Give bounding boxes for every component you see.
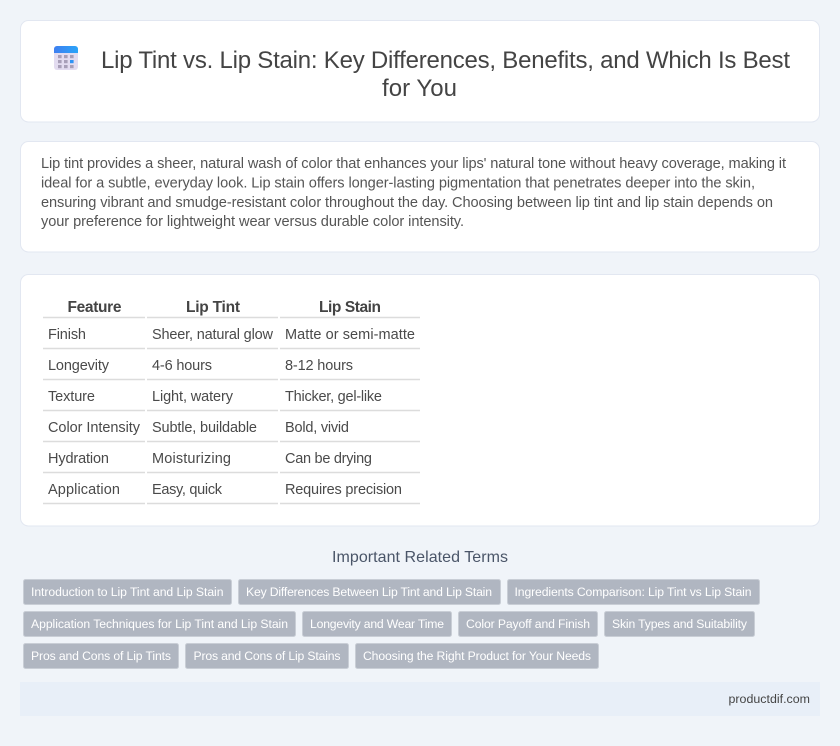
tag: Key Differences Between Lip Tint and Lip Stain <box>246 585 492 599</box>
tag <box>24 644 178 668</box>
text block: intro paragraph: Lip tint provides a sheer, natural wash of color that enhances your lips' natural tone without heavy coverage, making it <box>41 156 786 172</box>
footer bar: productdif.com <box>728 692 810 706</box>
table row: application: Easy, quick <box>152 482 223 498</box>
tag: Introduction to Lip Tint and Lip Stain <box>31 585 224 599</box>
table row: hydration: Can be drying <box>285 451 372 467</box>
table row: hydration <box>48 451 372 467</box>
table row: color intensity: Subtle, buildable <box>152 420 257 436</box>
table row: finish: Sheer, natural glow <box>152 327 274 343</box>
tag <box>302 612 452 636</box>
icon: calendar <box>54 46 78 70</box>
footer bar <box>20 682 820 716</box>
text block: intro paragraph: your preference for lightweight wear versus durable color intensity. <box>41 214 464 230</box>
text block: intro paragraph <box>41 156 786 230</box>
tag <box>238 580 500 604</box>
table row: longevity: 8-12 hours <box>285 358 353 374</box>
table row: texture: Texture <box>48 389 95 405</box>
table row: application: Requires precision <box>285 482 402 498</box>
tag: Color Payoff and Finish <box>466 617 590 631</box>
tag: Choosing the Right Product for Your Needs <box>363 649 591 663</box>
tag: Pros and Cons of Lip Tints <box>31 649 171 663</box>
title: Lip Tint vs. Lip Stain: Key Differences, Benefits, and Which Is Best <box>101 47 790 74</box>
table row: hydration: Hydration <box>48 451 109 467</box>
tag <box>508 580 760 604</box>
tag: Longevity and Wear Time <box>310 617 444 631</box>
tag <box>186 644 348 668</box>
text block: intro paragraph: ideal for a subtle, everyday look. Lip stain offers longer-lasting pigmentation that penetrates deeper into the skin, <box>41 176 755 192</box>
text block: intro paragraph: ensuring vibrant and smudge-resistant color throughout the day. Choosing between lip tint and lip stain depends on <box>41 195 773 211</box>
table row: texture <box>48 389 382 405</box>
table row: longevity: Longevity <box>48 358 110 374</box>
tag: Skin Types and Suitability <box>612 617 748 631</box>
related terms tags <box>24 580 760 668</box>
table header: Feature <box>68 299 122 316</box>
tag <box>356 644 598 668</box>
table row: color intensity: Color Intensity <box>48 420 141 436</box>
table row: color intensity <box>48 420 349 436</box>
table row: finish: Matte or semi-matte <box>285 327 415 343</box>
tag: Application Techniques for Lip Tint and Lip Stain <box>31 617 288 631</box>
tag: Pros and Cons of Lip Stains <box>194 649 340 663</box>
table row: longevity: 4-6 hours <box>152 358 212 374</box>
table row: longevity <box>48 358 353 374</box>
table row: color intensity: Bold, vivid <box>285 420 349 436</box>
heading: important related terms: Important Related Terms <box>332 549 508 566</box>
table row: application: Application <box>48 482 120 498</box>
table row: texture: Light, watery <box>152 389 234 405</box>
table row: finish: Finish <box>48 327 86 343</box>
title <box>101 47 790 102</box>
panel: comparison table <box>20 274 820 526</box>
table row: hydration: Moisturizing <box>152 451 231 467</box>
table header: Lip Tint <box>186 299 240 316</box>
tag <box>458 612 598 636</box>
table header: Lip Stain <box>319 299 381 316</box>
tag <box>604 612 754 636</box>
table row: application <box>48 482 402 498</box>
tag: Ingredients Comparison: Lip Tint vs Lip Stain <box>514 585 752 599</box>
panel: introduction text <box>20 142 820 252</box>
title: for You <box>382 75 457 102</box>
tag <box>24 580 232 604</box>
table header <box>68 299 381 316</box>
tag <box>24 612 296 636</box>
panel: title card <box>20 20 820 122</box>
table row: finish <box>48 327 415 343</box>
table row: texture: Thicker, gel-like <box>285 389 382 405</box>
